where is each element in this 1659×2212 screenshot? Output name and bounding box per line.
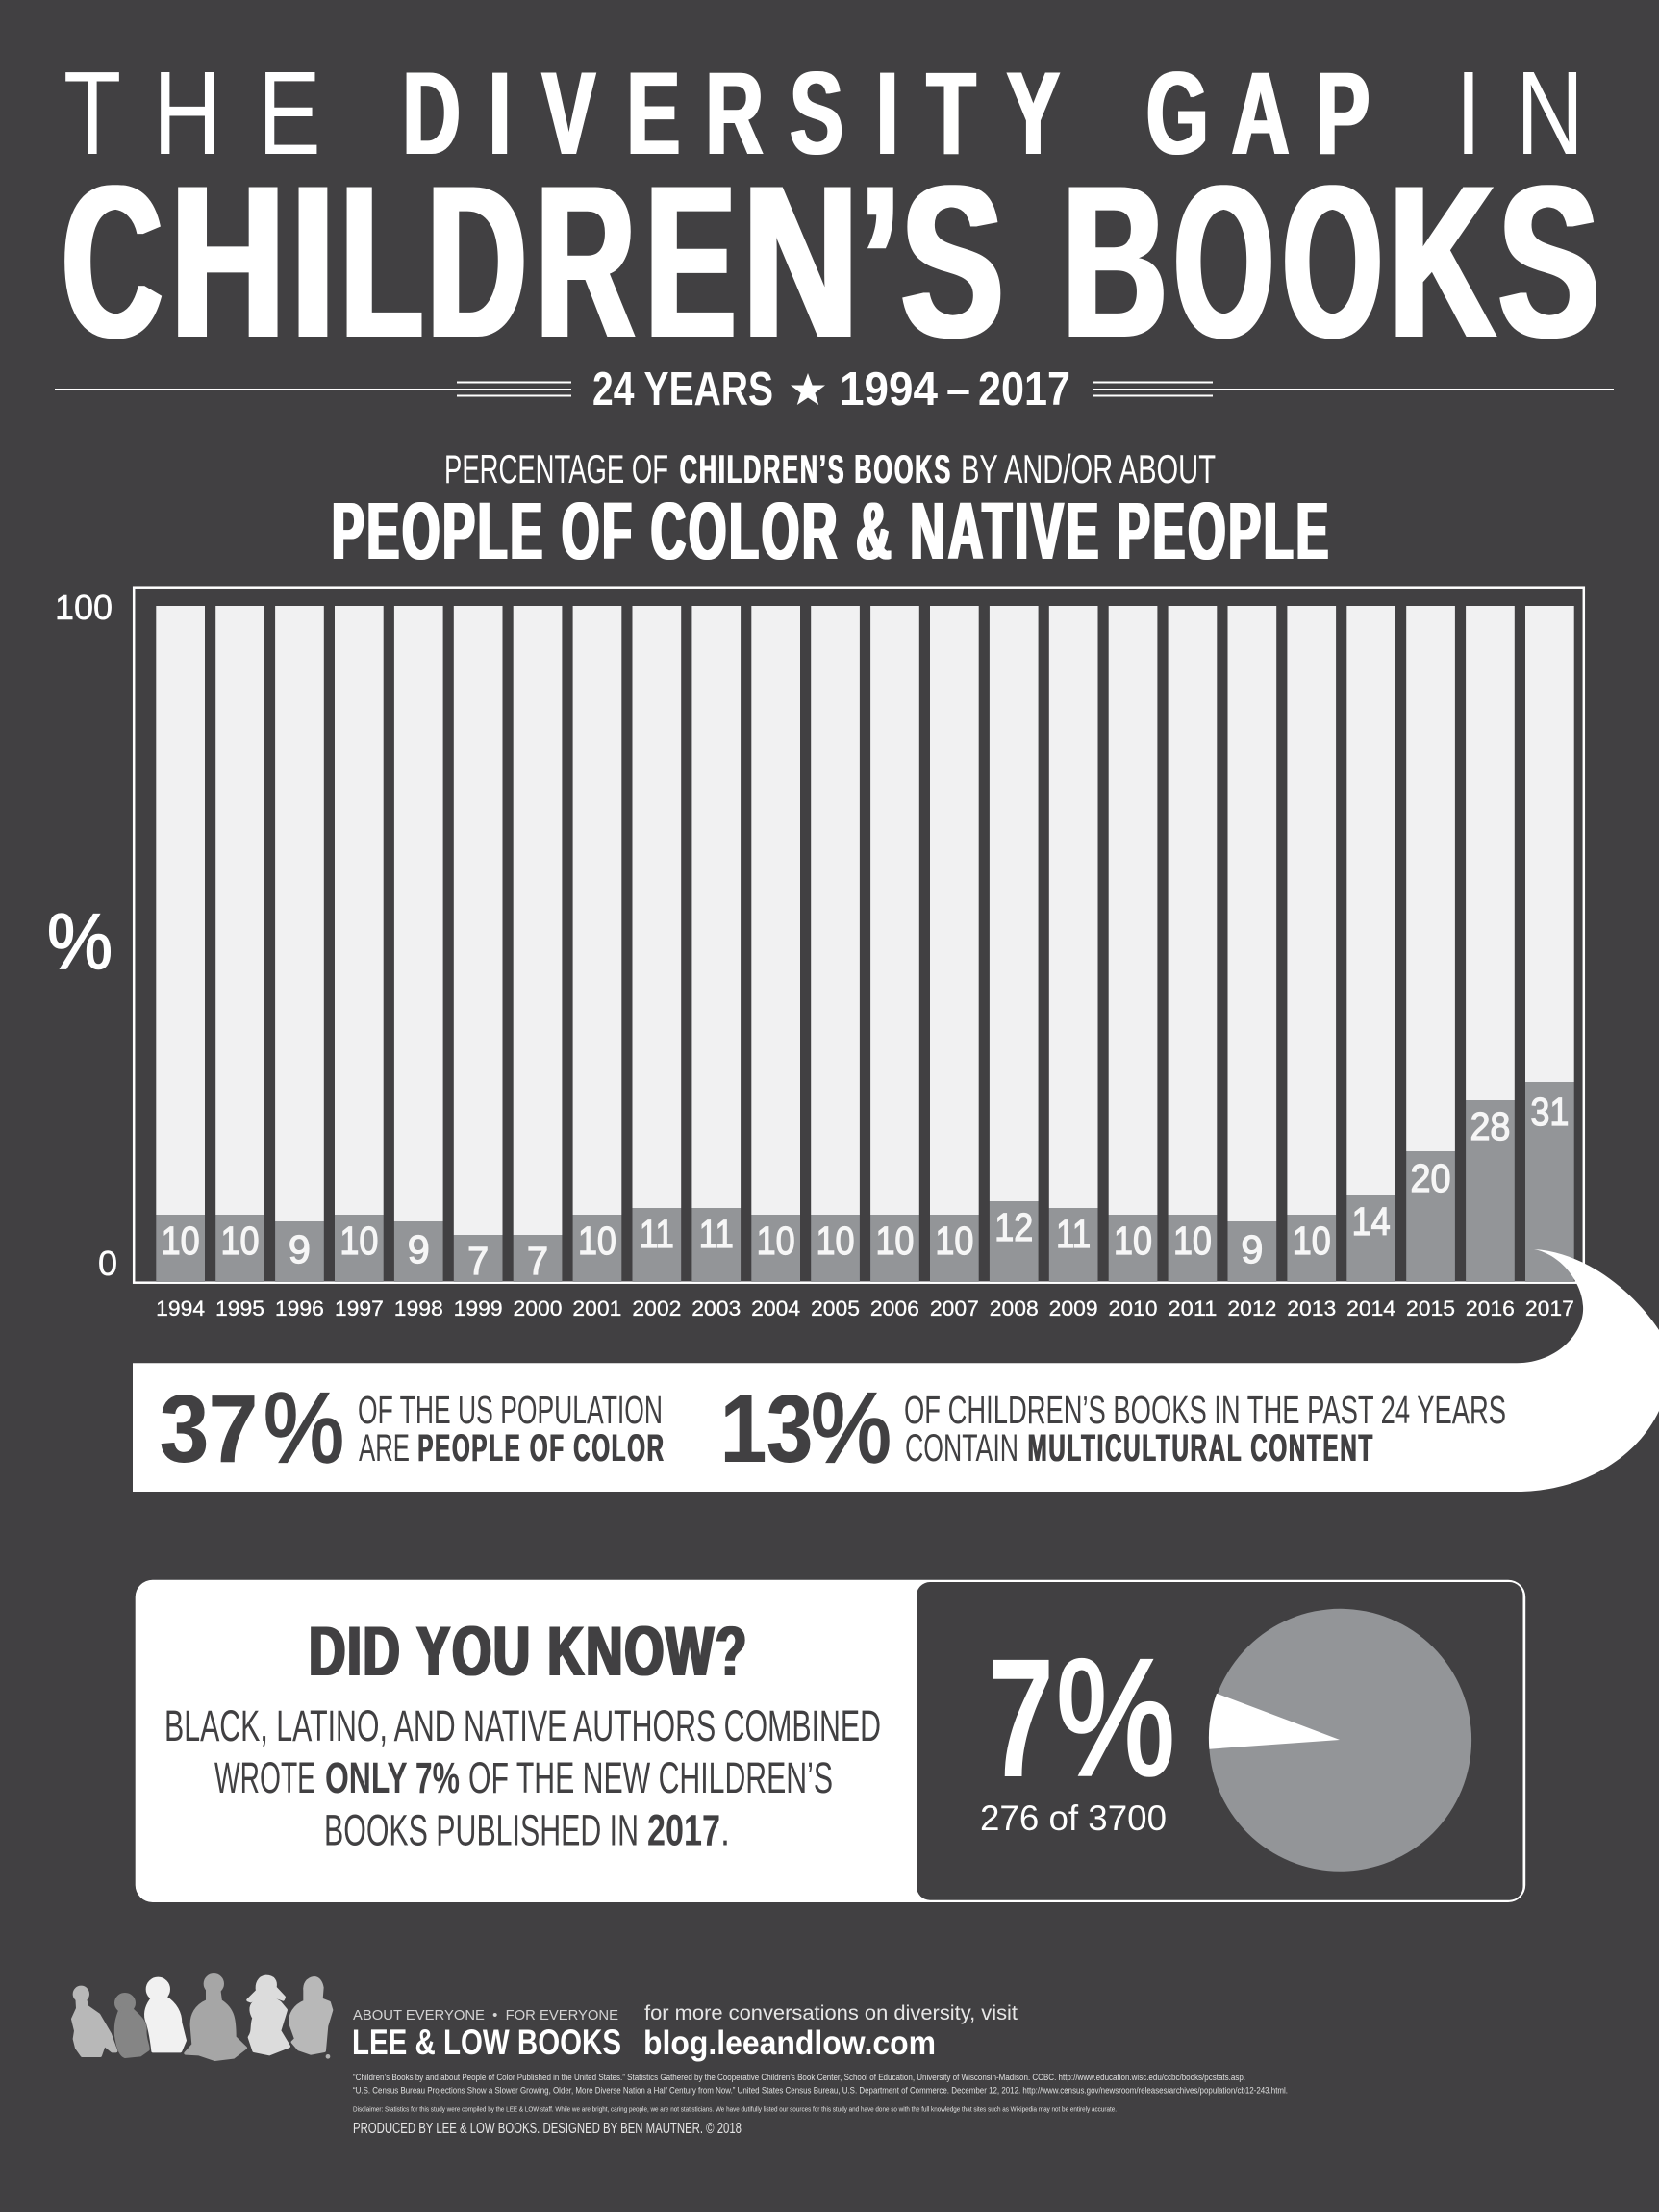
publisher name: LEE & LOW BOOKS bbox=[352, 2023, 621, 2062]
did you know body text: BOOKS PUBLISHED IN bbox=[324, 1806, 639, 1855]
chart heading: CHILDREN’S BOOKS bbox=[680, 448, 950, 492]
bar 2003 bbox=[691, 606, 741, 1320]
bar 2015: 2015 bbox=[1406, 1296, 1455, 1320]
title line two bbox=[62, 139, 1599, 383]
caption: 276 of 3700: 276 of 3700 bbox=[980, 1798, 1167, 1838]
bar 1998: 1998 bbox=[394, 1296, 443, 1320]
bar 2001 bbox=[572, 606, 621, 1320]
banner speech shape bbox=[133, 1249, 1659, 1492]
bar 2007 bbox=[930, 606, 979, 1320]
source notes bbox=[353, 2073, 1288, 2114]
title line two: I bbox=[290, 139, 335, 383]
dark inset panel bbox=[917, 1582, 1523, 1900]
stat: 37 percent: % bbox=[264, 1372, 344, 1483]
title line two: C bbox=[62, 139, 163, 383]
bar 1997: 1997 bbox=[335, 1296, 384, 1320]
bar 2008 bbox=[990, 606, 1039, 1320]
stat: 13 percent: % bbox=[811, 1372, 892, 1483]
bar 2003: 2003 bbox=[691, 1296, 741, 1320]
stat: 7 percent bbox=[988, 1624, 1175, 1813]
bar 2014: 14 bbox=[1352, 1199, 1391, 1244]
bar 2013: 10 bbox=[1293, 1219, 1331, 1263]
title line two: H bbox=[170, 139, 286, 383]
bar 2004: 2004 bbox=[751, 1296, 800, 1320]
bar 2007: 10 bbox=[935, 1219, 973, 1263]
bar 2006 bbox=[870, 606, 919, 1320]
y axis labels: % bbox=[47, 898, 113, 986]
callout banner bbox=[133, 1249, 1659, 1492]
title line two: L bbox=[340, 139, 423, 383]
title line two: S bbox=[901, 139, 1004, 383]
blog link: for more conversations on diversity, visit bbox=[644, 2002, 1018, 2024]
title line two: E bbox=[645, 139, 736, 383]
bar 1995 bbox=[215, 606, 264, 1320]
title bbox=[62, 46, 1599, 383]
stat: 37 percent bbox=[160, 1372, 664, 1483]
title line two: ’ bbox=[861, 139, 900, 383]
bar 2004: 10 bbox=[757, 1219, 795, 1263]
bar 2013: 2013 bbox=[1287, 1296, 1336, 1320]
bar 2001: 2001 bbox=[572, 1296, 621, 1320]
bar 1995: 1995 bbox=[215, 1296, 264, 1320]
bar 2010 bbox=[1109, 606, 1158, 1320]
stat: 13 percent bbox=[720, 1372, 1506, 1483]
stat: 37 percent: PEOPLE OF COLOR bbox=[417, 1426, 664, 1469]
title line two: D bbox=[427, 139, 527, 383]
y axis labels: 100 bbox=[55, 588, 113, 627]
stat: 13 percent: CONTAIN bbox=[905, 1427, 1018, 1470]
bar 2011: 10 bbox=[1173, 1219, 1212, 1263]
bar 2004 bbox=[751, 606, 800, 1320]
bar 1994: 10 bbox=[162, 1219, 200, 1263]
bar 2017 bbox=[1525, 606, 1574, 1320]
source notes: Disclaimer: Statistics for this study were compiled by the LEE & LOW staff. While we are bright, caring people, we are not statisticians. We have dutifully listed our sources for this study and have done so with the full knowledge that sites such as Wikipedia may not be entirely accurate. bbox=[353, 2105, 1117, 2114]
stat: 37 percent: 37 bbox=[160, 1375, 258, 1483]
did you know body text: ONLY 7% bbox=[325, 1753, 460, 1802]
title line one: GAP bbox=[1146, 48, 1370, 180]
title line two: K bbox=[1389, 139, 1496, 383]
bar 2007: 2007 bbox=[930, 1296, 979, 1320]
bar 1998 bbox=[394, 606, 443, 1320]
did you know body text: 2017 bbox=[647, 1806, 720, 1855]
bar 2000: 2000 bbox=[514, 1296, 563, 1320]
source notes: “U.S. Census Bureau Projections Show a Slower Growing, Older, More Diverse Nation a Half Century from Now.” United States Census Bureau, U.S. Department of Commerce. December 12, 2012. http://www.census.gov/newsroom/releases/archives/population/cb12-243.html. bbox=[353, 2086, 1288, 2096]
subtitle rule with dates: – bbox=[946, 364, 970, 415]
heading: did you know: DID YOU KNOW? bbox=[309, 1611, 746, 1691]
bar 1994: 1994 bbox=[156, 1296, 205, 1320]
stat: 7 percent: 7 bbox=[988, 1624, 1054, 1813]
bar 2011: 2011 bbox=[1168, 1296, 1217, 1320]
bar 2005: 2005 bbox=[811, 1296, 860, 1320]
title line two: O bbox=[1283, 139, 1382, 383]
footer bbox=[73, 1975, 1288, 2137]
bar 2002: 2002 bbox=[632, 1296, 681, 1320]
bar 2015 bbox=[1406, 606, 1455, 1320]
bar 2005 bbox=[811, 606, 860, 1320]
bar 1996 bbox=[275, 606, 324, 1320]
bar 1999 bbox=[454, 606, 503, 1320]
bar 1994 bbox=[156, 606, 205, 1320]
stat: 13 percent: 13 bbox=[720, 1375, 813, 1483]
bar 2009: 2009 bbox=[1049, 1296, 1098, 1320]
chart heading: PERCENTAGE OF bbox=[444, 446, 668, 491]
bar 2006: 2006 bbox=[870, 1296, 919, 1320]
bar 2008: 12 bbox=[994, 1205, 1033, 1249]
bar 1996: 1996 bbox=[275, 1296, 324, 1320]
chart frame bbox=[134, 588, 1584, 1283]
logo: seated children silhouettes bbox=[73, 1975, 332, 2059]
chart heading: PEOPLE OF COLOR & NATIVE PEOPLE bbox=[332, 486, 1328, 576]
y axis labels: 0 bbox=[98, 1244, 117, 1283]
bar 2003: 11 bbox=[699, 1212, 734, 1256]
stat: 7 percent: % bbox=[1056, 1625, 1175, 1810]
bar 2012: 9 bbox=[1241, 1227, 1263, 1271]
bar 2011 bbox=[1168, 606, 1217, 1320]
bar 1998: 9 bbox=[408, 1227, 430, 1271]
source notes: “Children’s Books by and about People of Color Published in the United States.” Statistics Gathered by the Cooperative Children’s Book Center, School of Education, University of Wisconsin-Madison. CCBC. http://www.education.wisc.edu/ccbc/books/pcstats.asp. bbox=[353, 2073, 1245, 2082]
bar 1996: 9 bbox=[289, 1227, 311, 1271]
title line two: B bbox=[1062, 139, 1168, 383]
bar 2013 bbox=[1287, 606, 1336, 1320]
bar 2014: 2014 bbox=[1346, 1296, 1395, 1320]
blog link bbox=[643, 2002, 1018, 2062]
subtitle rule with dates: 24 YEARS bbox=[592, 364, 773, 415]
bar 2010: 10 bbox=[1114, 1219, 1152, 1263]
bar 2017: 31 bbox=[1530, 1090, 1569, 1134]
title line two: O bbox=[1174, 139, 1273, 383]
bar chart bbox=[156, 606, 1574, 1320]
title line one bbox=[63, 46, 1584, 180]
bar 1999: 7 bbox=[467, 1239, 489, 1283]
title line one: IN bbox=[1455, 46, 1584, 180]
bar 2009 bbox=[1049, 606, 1098, 1320]
publisher name: ABOUT EVERYONE • FOR EVERYONE bbox=[353, 2008, 618, 2023]
bar 2012: 2012 bbox=[1227, 1296, 1276, 1320]
bar 2010: 2010 bbox=[1109, 1296, 1158, 1320]
bar 2009: 11 bbox=[1056, 1212, 1091, 1256]
publisher name bbox=[352, 2008, 621, 2062]
chart heading bbox=[332, 446, 1328, 576]
bar 2012 bbox=[1227, 606, 1276, 1320]
y axis labels bbox=[47, 588, 117, 1283]
chart heading: BY AND/OR ABOUT bbox=[961, 446, 1216, 491]
stat: 37 percent: ARE bbox=[359, 1427, 410, 1470]
bar 2016: 28 bbox=[1470, 1104, 1510, 1148]
bar 2017: 2017 bbox=[1525, 1296, 1574, 1320]
bar 2001: 10 bbox=[578, 1219, 616, 1263]
bar 2006: 10 bbox=[875, 1219, 914, 1263]
subtitle rule with dates bbox=[55, 364, 1614, 415]
did you know body text: WROTE bbox=[214, 1753, 315, 1802]
bar 1995: 10 bbox=[221, 1219, 260, 1263]
pie chart bbox=[1209, 1609, 1471, 1872]
bar 2016: 2016 bbox=[1466, 1296, 1515, 1320]
subtitle rule with dates: 2017 bbox=[978, 364, 1070, 415]
title line one: THE bbox=[63, 46, 321, 180]
bar 2000 bbox=[514, 606, 563, 1320]
bar 2002: 11 bbox=[640, 1212, 674, 1256]
did you know body text bbox=[164, 1701, 881, 1855]
bar 1997: 10 bbox=[339, 1219, 378, 1263]
bar 2005: 10 bbox=[817, 1219, 855, 1263]
bar 2014 bbox=[1346, 606, 1395, 1320]
bar 2016 bbox=[1466, 606, 1515, 1320]
bar 1997 bbox=[335, 606, 384, 1320]
did you know body text: BLACK, LATINO, AND NATIVE AUTHORS COMBINED bbox=[164, 1701, 881, 1750]
did you know body text: OF THE NEW CHILDREN’S bbox=[468, 1753, 833, 1802]
bar 2002 bbox=[632, 606, 681, 1320]
stat: 37 percent: OF THE US POPULATION bbox=[358, 1388, 663, 1432]
bar 2008: 2008 bbox=[990, 1296, 1039, 1320]
blog link: blog.leeandlow.com bbox=[643, 2024, 936, 2062]
title line two: N bbox=[742, 139, 859, 383]
title line two: R bbox=[536, 139, 636, 383]
stat: 13 percent: MULTICULTURAL CONTENT bbox=[1028, 1426, 1372, 1469]
did you know body text: . bbox=[720, 1806, 730, 1855]
bar 2015: 20 bbox=[1411, 1156, 1451, 1200]
bar 2000: 7 bbox=[527, 1239, 548, 1283]
subtitle rule with dates: 1994 bbox=[840, 364, 938, 415]
title line two: S bbox=[1498, 139, 1599, 383]
title line one: DIVERSITY bbox=[402, 48, 1060, 180]
credits: PRODUCED BY LEE & LOW BOOKS. DESIGNED BY BEN MAUTNER. © 2018 bbox=[353, 2121, 742, 2137]
panel: did you know bbox=[136, 1580, 1525, 1902]
bar 1999: 1999 bbox=[454, 1296, 503, 1320]
